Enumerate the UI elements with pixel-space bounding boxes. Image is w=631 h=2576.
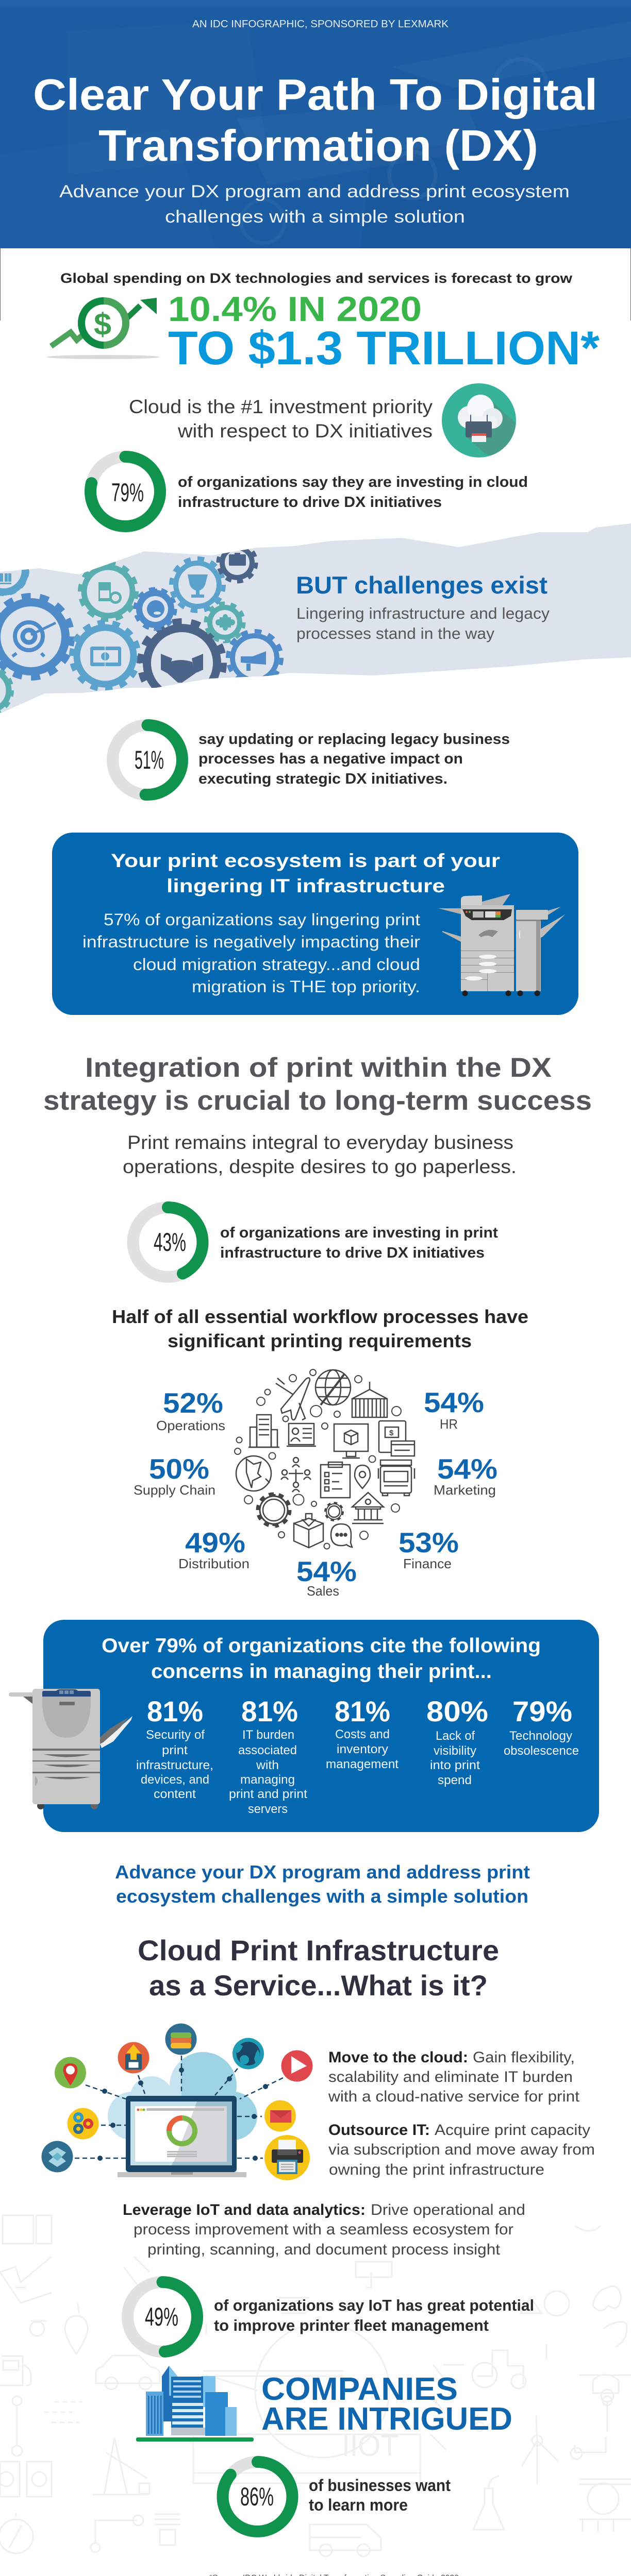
concern: IT burden: with [256,1758,279,1772]
text: outsource IT [328,2122,595,2178]
title [33,71,597,171]
text: move to the cloud: Gain flexibility, [473,2049,575,2066]
icon: handshake [161,654,203,683]
stat: sales: Sales [307,1583,339,1599]
panel heading: Your print ecosystem is part of your [111,850,500,871]
text: leverage IoT: Leverage IoT and data analytics: [123,2201,366,2218]
concern: costs: Costs and [335,1727,390,1741]
stat: HR: HR [440,1416,458,1432]
icon: calendar and clock [98,582,122,604]
heading: companies are intrigued: ARE INTRIGUED [261,2401,512,2437]
header banner [0,0,631,248]
panel body text [82,910,420,996]
icon: puzzle [215,614,235,631]
icon: target [12,622,56,656]
concern: security: infrastructure, [136,1758,213,1772]
icon: dollar coin with rising arrow: $ [94,307,111,342]
stat: HR [424,1386,484,1432]
text: print remains integral: operations, despite desires to go paperless. [123,1156,517,1177]
panel heading [111,850,500,896]
icon: database [165,2024,197,2055]
icon: leaf badge [147,600,164,618]
icon: office towers [136,2366,254,2442]
concern: visibility: Lack of [436,1729,475,1743]
subtitle: challenges with a simple solution [165,207,465,227]
panel body text: infrastructure is negatively impacting their [82,933,420,951]
icon: floor printer [438,894,565,996]
text: print investment stat [220,1225,498,1261]
concern: security: print [162,1743,188,1757]
icon: banknote [90,647,121,666]
heading: advance your DX: ecosystem challenges with a simple solution [116,1886,528,1907]
illustration: laptop in cloud with service icons [41,2024,312,2180]
donut chart: 51% [112,725,182,794]
icon: gears [67,2108,99,2139]
stat: operations: 52% [163,1387,223,1419]
text: move to the cloud [328,2049,580,2105]
concern: costs: inventory [337,1742,388,1756]
concern: obsolescence: 79% [512,1695,572,1727]
title: Clear Your Path To Digital [33,71,597,120]
panel body text: migration is THE top priority. [192,977,420,996]
panel: print ecosystem [52,833,578,1015]
icon: globe with plane [315,1370,351,1405]
concern: visibility: 80% [426,1695,488,1727]
concern: security [136,1695,213,1801]
stat: operations [156,1387,225,1433]
donut chart: 79%: 79% [111,478,144,507]
cloud [108,2052,257,2140]
icon: truck front [378,1460,414,1496]
subtitle [59,182,570,227]
icon: container on crane [352,1382,387,1417]
concern: IT burden: managing [240,1773,295,1787]
icon: play button [281,2050,312,2081]
donut chart: 86%: 86% [240,2482,274,2511]
text: leverage IoT: process improvement with a seamless ecosystem for [134,2221,513,2238]
panel: challenges band [0,523,631,714]
stat: distribution: Distribution [178,1556,250,1571]
icon: office printer [9,1689,132,1809]
text: leverage IoT: Drive operational and [371,2201,525,2218]
icon: clipboard checklist [321,1462,350,1498]
text: legacy stat: executing strategic DX initiatives. [198,771,447,787]
concern: obsolescence: Technology [509,1729,572,1743]
heading: integration of print: strategy is crucial to long-term success [43,1086,592,1116]
icon: envelope [264,2100,296,2132]
concern: IT burden: associated [238,1743,297,1757]
sponsor line: AN IDC INFOGRAPHIC, SPONSORED BY LEXMARK [192,19,449,30]
concern: costs: 81% [335,1695,390,1727]
text: cloud investment stat [178,474,528,511]
headline stat: 10.4% in 2020: 10.4% IN 2020 [168,290,422,329]
stat: operations: Operations [156,1418,225,1433]
text: legacy stat: say updating or replacing legacy business [198,731,510,748]
subtitle: Advance your DX program and address print ecosystem [59,182,570,201]
icon: office building [248,1415,279,1447]
concern: visibility: spend [438,1773,472,1787]
concern: IT burden: 81% [241,1695,298,1727]
stat: marketing: 54% [437,1453,497,1485]
heading: workflow processes: Half of all essential workflow processes have [112,1306,528,1327]
icon: cloud printer [442,383,516,457]
icon cluster: workflow line icons [235,1369,414,1549]
icon: dollar coin with rising arrow [46,298,160,359]
text: legacy processes: processes stand in the way [296,624,494,642]
donut chart: 43% [133,1208,203,1277]
text: legacy processes [296,604,550,642]
stat: HR: 54% [424,1386,484,1418]
text: leverage IoT: printing, scanning, and document process insight [147,2241,501,2258]
concern: security: content [154,1787,196,1801]
stat: distribution [178,1527,250,1571]
headline stat: to $1.3 trillion: TO $1.3 TRILLION* [168,322,600,375]
text: leverage IoT [123,2201,525,2258]
icon: small gear [325,1503,343,1520]
title: Transformation (DX) [98,122,538,171]
donut chart: 49% [128,2282,197,2351]
text: legacy processes: Lingering infrastructure and legacy [296,604,550,622]
text: move to the cloud: with a cloud-native service for print [328,2088,580,2105]
donut chart: 49%: 49% [145,2302,178,2331]
stat: marketing [434,1453,497,1498]
text: legacy stat [198,731,510,787]
concern: visibility: visibility [434,1744,476,1758]
donut chart: 79% [91,456,160,527]
panel: print concerns [9,1620,599,1832]
icon: map pin [355,1465,370,1488]
concern: obsolescence: obsolescence [504,1744,579,1758]
icon: bars [0,573,11,584]
concern: visibility [426,1695,488,1787]
stat: finance [398,1527,459,1571]
heading: cloud print infrastructure [138,1934,499,2002]
icon cluster: business gears [0,544,281,714]
icon: large gear [258,1494,290,1526]
concern: visibility: into print [430,1758,480,1772]
icon: laptop profile [287,1423,316,1446]
text: learn more stat: of businesses want [309,2476,451,2495]
panel heading: lingering IT infrastructure [167,875,445,896]
panel body text: 57% of organizations say lingering print [104,910,420,929]
donut chart: 86% [223,2462,292,2532]
stat: finance: Finance [403,1556,452,1571]
stat: supply chain: 50% [149,1453,209,1485]
concern: IT burden: servers [248,1802,288,1816]
stat: sales [296,1555,357,1599]
icon: printer [264,2135,310,2180]
panel heading: concerns in managing their print... [151,1660,492,1683]
icon: tablet and card [379,1421,414,1456]
connectors [75,2056,283,2158]
text: print remains integral [123,1132,517,1177]
text: outsource IT: Acquire print capacity [435,2122,590,2139]
text: print remains integral: Print remains integral to everyday business [127,1132,513,1153]
concern: security: devices, and [141,1773,209,1787]
stat: supply chain: Supply Chain [134,1482,215,1498]
heading: advance your DX: Advance your DX program and address print [115,1861,530,1883]
text: outsource IT: Outsource IT: [328,2122,430,2139]
concern: IT burden [229,1695,307,1816]
panel heading: Over 79% of organizations cite the following [102,1635,541,1657]
concern: costs: management [326,1757,398,1771]
concern: IT burden: IT burden [242,1728,294,1742]
icon: globe [233,2038,264,2069]
icon: tablet and card: $ [389,1429,394,1437]
icon: upload save [118,2042,150,2073]
forecast lead-in text: Global spending on DX technologies and services is forecast to grow [60,270,573,286]
text: IoT stat: to improve printer fleet management [214,2316,489,2334]
panel body text: cloud migration strategy...and cloud [133,955,420,974]
heading: workflow processes [112,1306,528,1351]
text: IoT stat: of organizations say IoT has great potential [214,2296,534,2314]
text: learn more stat [309,2476,451,2514]
icon: chat bubble [331,1524,352,1547]
text: cloud investment stat: of organizations say they are investing in cloud [178,474,528,490]
icon: monitor with parcel [334,1424,368,1458]
laptop [118,2096,246,2177]
text: outsource IT: owning the print infrastructure [329,2161,544,2178]
text: print investment stat: infrastructure to drive DX initiatives [220,1245,485,1261]
stat: sales: 54% [296,1555,357,1587]
heading: cloud print infrastructure: Cloud Print Infrastructure [138,1934,499,1967]
concern: IT burden: print and print [229,1787,307,1801]
text: cloud priority: with respect to DX initiatives [177,420,433,442]
concern: security: Security of [146,1728,205,1742]
icon: plane [276,1378,310,1420]
background pattern: faint IoT line icons [0,2215,631,2556]
text: cloud priority [129,396,433,442]
text: move to the cloud: Move to the cloud: [328,2049,468,2066]
icon: megaphone [241,651,266,671]
heading: companies are intrigued [261,2371,512,2437]
heading: workflow processes: significant printing requirements [168,1330,472,1351]
icon: bank [352,1493,384,1523]
text: outsource IT: via subscription and move away from [328,2141,595,2158]
stat: finance: 53% [398,1527,459,1558]
heading: integration of print: Integration of print within the DX [85,1053,552,1083]
icon: trophy [188,574,208,598]
icon: world globe [236,1456,271,1491]
text: IoT stat [214,2296,534,2334]
donut chart: 43%: 43% [154,1228,186,1257]
background pattern label: IIOT: IIOT [342,2429,398,2463]
icon: open box [41,2141,73,2172]
panel heading [102,1635,541,1683]
stat: supply chain [134,1453,215,1498]
text: cloud investment stat: infrastructure to drive DX initiatives [178,494,442,511]
text: move to the cloud: scalability and eliminate IT burden [328,2069,573,2086]
text: legacy stat: processes has a negative impact on [198,751,463,767]
heading: companies are intrigued: COMPANIES [261,2371,458,2407]
text: cloud priority: Cloud is the #1 investment priority [129,396,433,417]
text: print investment stat: of organizations are investing in print [220,1225,498,1241]
concern: costs [326,1695,398,1771]
text: learn more stat: to learn more [309,2496,408,2514]
concern: security: 81% [147,1695,203,1727]
icon: briefcase [229,553,246,566]
concern: obsolescence [504,1695,579,1758]
icon: parcel with arrow [294,1514,323,1548]
icon: location pin [55,2057,86,2089]
heading: advance your DX [115,1861,530,1907]
heading: but challenges exist: BUT challenges exist [296,571,547,599]
heading: cloud print infrastructure: as a Service...What is it? [149,1969,488,2002]
icon: people network [281,1458,311,1492]
heading: integration of print [43,1053,592,1116]
stat: distribution: 49% [185,1527,245,1558]
stat: marketing: Marketing [434,1482,496,1498]
donut chart: 51%: 51% [135,745,164,774]
small circles [235,1369,401,1549]
